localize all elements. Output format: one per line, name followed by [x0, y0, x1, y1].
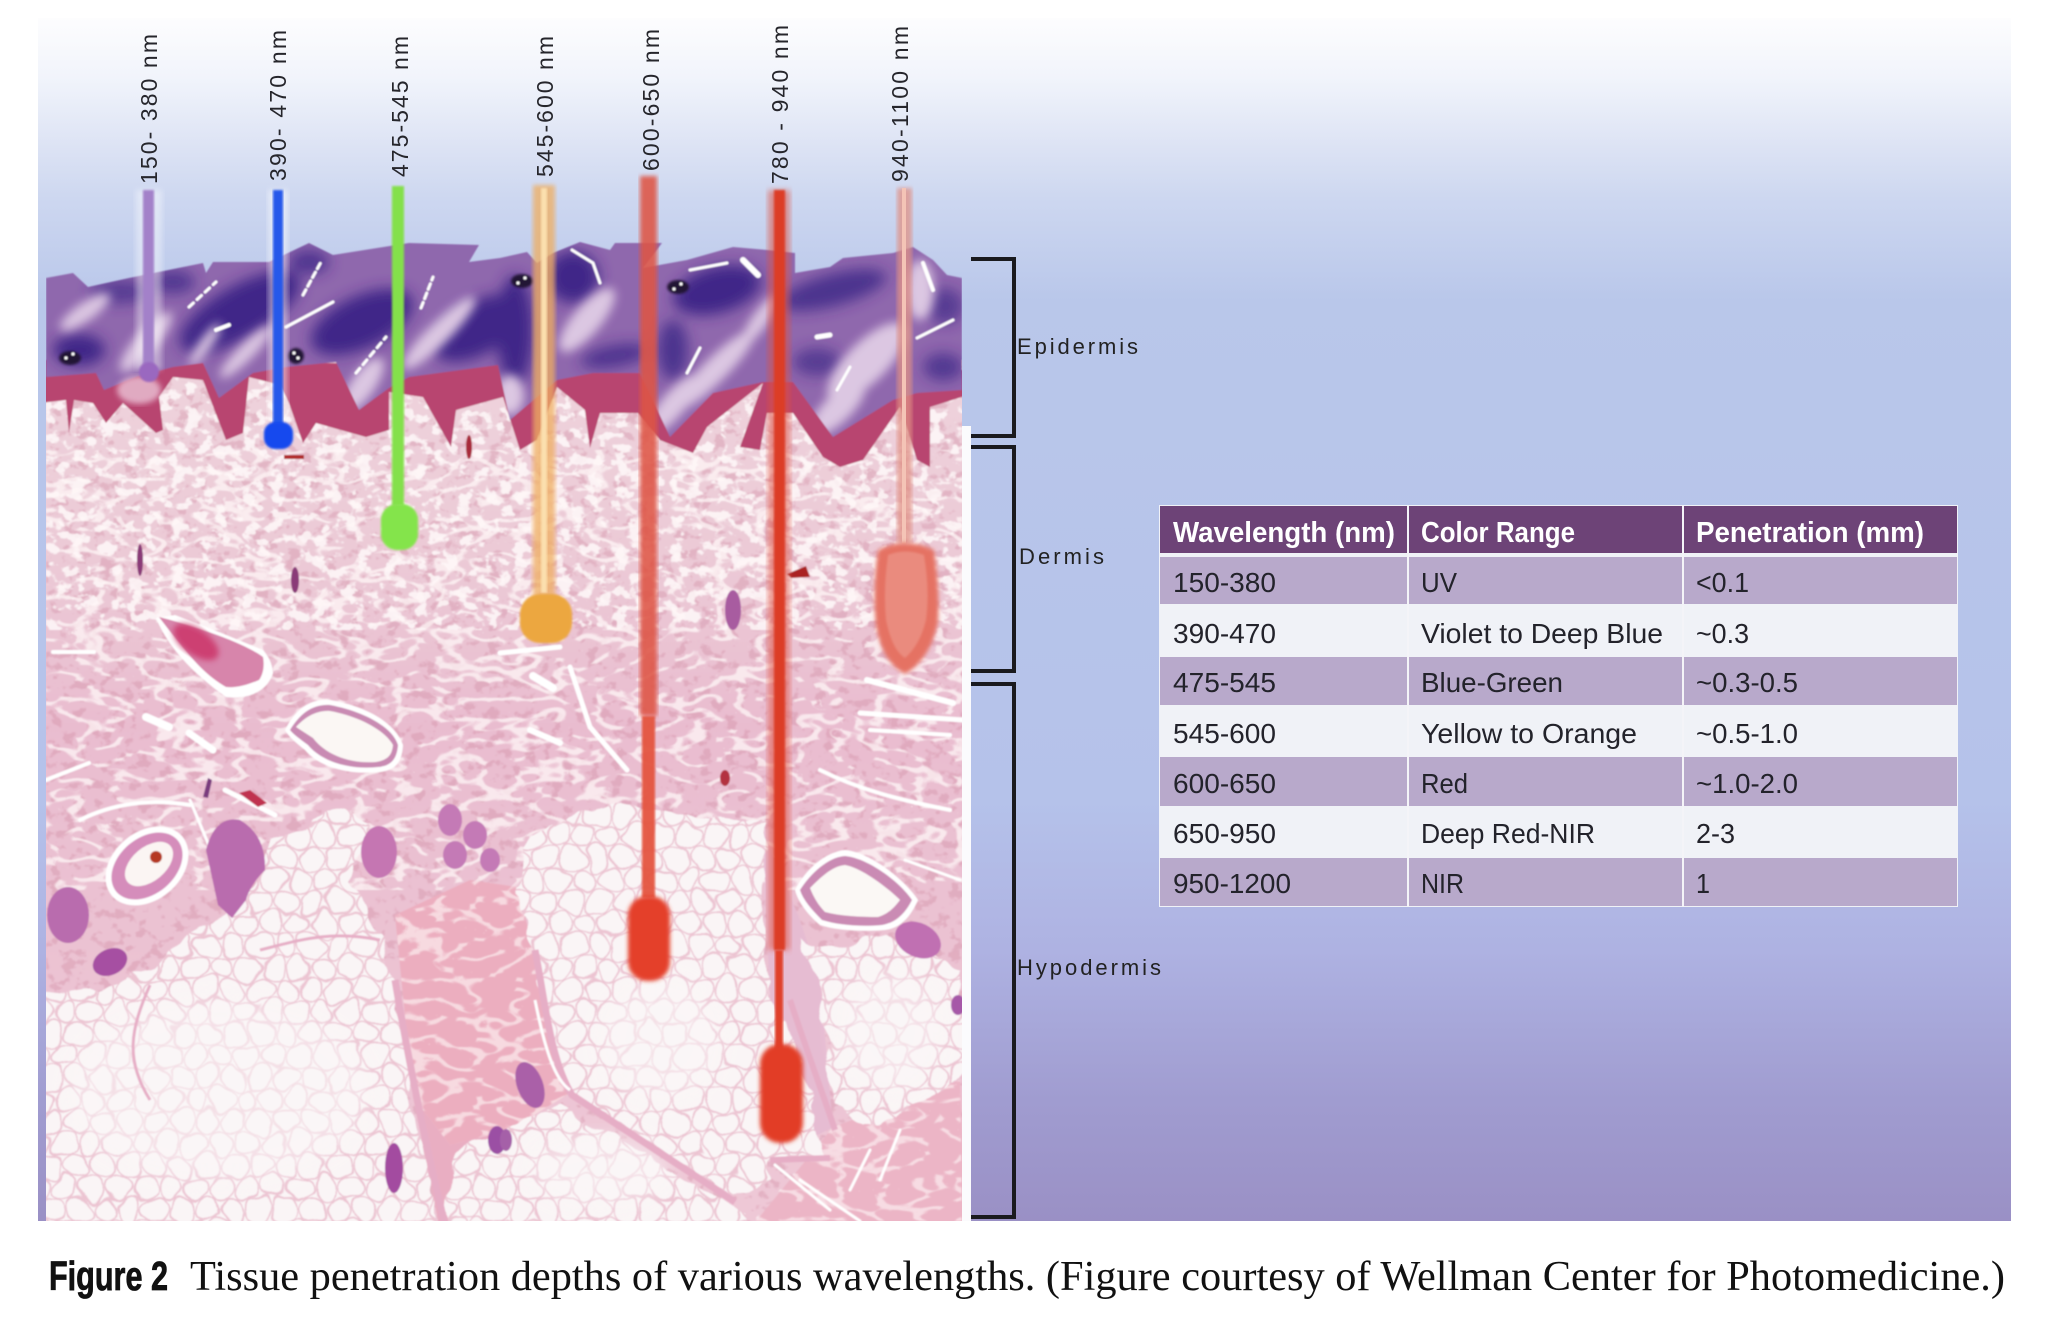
- dark pigment specks: [59, 274, 689, 365]
- layer label: Hypodermis: Hypodermis: [1017, 955, 1161, 980]
- table body text: UV: [1421, 567, 1457, 598]
- table body text: [1173, 567, 1798, 899]
- beam: 545-600 nm orange: [520, 185, 572, 643]
- label: 150-380 nm: 150- 380 nm: [136, 34, 162, 184]
- white collagen veins: [46, 450, 966, 890]
- bracket: epidermis: [971, 259, 1014, 436]
- beam: 475-545 nm green: [381, 186, 418, 550]
- table body text: ~0.3: [1696, 618, 1749, 649]
- layer label: Dermis: Dermis: [1019, 544, 1104, 569]
- hair follicle, right: [795, 850, 918, 931]
- table body text: Deep Red-NIR: [1421, 818, 1595, 849]
- beam: 390-470 nm blue: [264, 190, 293, 449]
- adipose fat lobules: [40, 803, 966, 1230]
- label: 940-1100 nm: 940-1100 nm: [887, 26, 913, 182]
- epidermis purple layer: [46, 240, 963, 443]
- layer label: Epidermis: Epidermis: [1017, 334, 1138, 359]
- label: 600-650 nm: 600-650 nm: [638, 29, 664, 171]
- table body text: 545-600: [1173, 718, 1276, 749]
- table header: Color Range: [1421, 517, 1575, 549]
- sweat glands: [47, 804, 965, 1193]
- wavelength labels: [136, 25, 913, 184]
- blood vessel, upper dermis: [156, 615, 273, 698]
- table frame and rows: [1159, 505, 1958, 907]
- caption text: Tissue penetration depths of various wavelengths. (Figure courtesy of Wellman Center for Photomedicine.): [190, 1254, 2005, 1300]
- table body text: 2-3: [1696, 818, 1735, 849]
- label: 780-940 nm: 780 - 940 nm: [767, 25, 793, 184]
- table body text: Red: [1421, 768, 1468, 799]
- pale washes over fat: [70, 970, 940, 1205]
- beam: 150-380 nm UV: [117, 190, 162, 404]
- table body text: 390-470: [1173, 618, 1276, 649]
- table body text: NIR: [1421, 868, 1464, 899]
- dermis and hypodermis tissue base: [40, 360, 970, 1230]
- white vein streaks: [46, 647, 963, 1221]
- caption label: Figure 2: Figure 2: [49, 1253, 168, 1299]
- table body text: Blue-Green: [1421, 667, 1563, 698]
- beam: 600-650 nm red: [628, 176, 670, 981]
- table body text: ~0.3-0.5: [1696, 667, 1798, 698]
- caption: [49, 1253, 2005, 1300]
- label: 545-600 nm: 545-600 nm: [532, 36, 558, 177]
- rete ridges, magenta layer: [40, 360, 968, 467]
- table body text: 475-545: [1173, 667, 1276, 698]
- hair follicle, upper: [285, 700, 403, 773]
- table body text: 650-950: [1173, 818, 1276, 849]
- table: wavelength, color range, penetration: [1159, 505, 1958, 907]
- table body text: 950-1200: [1173, 868, 1291, 899]
- table body text: 150-380: [1173, 567, 1276, 598]
- bracket: dermis: [971, 447, 1014, 671]
- white cracks: [189, 250, 953, 390]
- beam: 780-940 nm deep red: [760, 190, 803, 1143]
- table body text: 600-650: [1173, 768, 1276, 799]
- table body text: <0.1: [1696, 567, 1749, 598]
- histology image: skin cross-section: [40, 240, 970, 1230]
- connective septa: [133, 936, 835, 1225]
- label: 390-470 nm: 390- 470 nm: [265, 30, 291, 181]
- table body text: ~0.5-1.0: [1696, 718, 1798, 749]
- table header: Penetration (mm): [1696, 517, 1924, 549]
- table body text: ~1.0-2.0: [1696, 768, 1798, 799]
- pale lilac streaks: [55, 260, 934, 443]
- granular white texture, upper dermis: [46, 360, 966, 630]
- table header: [1173, 517, 1924, 549]
- table body text: Yellow to Orange: [1421, 718, 1637, 749]
- white strip beside histology image: [962, 426, 971, 1221]
- small red and dark vessels: [137, 435, 810, 807]
- table header: Wavelength (nm): [1173, 517, 1395, 549]
- label: 475-545 nm: 475-545 nm: [387, 36, 413, 177]
- muscle and connective tissue regions: [390, 830, 970, 1230]
- dark purple diagonal bands: [53, 250, 963, 385]
- table body text: Violet to Deep Blue: [1421, 618, 1663, 649]
- fine pink texture: [46, 360, 966, 1230]
- table body text: 1: [1696, 868, 1710, 899]
- hair follicle, left: [104, 826, 190, 906]
- pale septum highlight: [535, 1000, 570, 1090]
- beam: 940-1100 nm pale red: [874, 188, 938, 674]
- bracket: hypodermis: [971, 684, 1014, 1217]
